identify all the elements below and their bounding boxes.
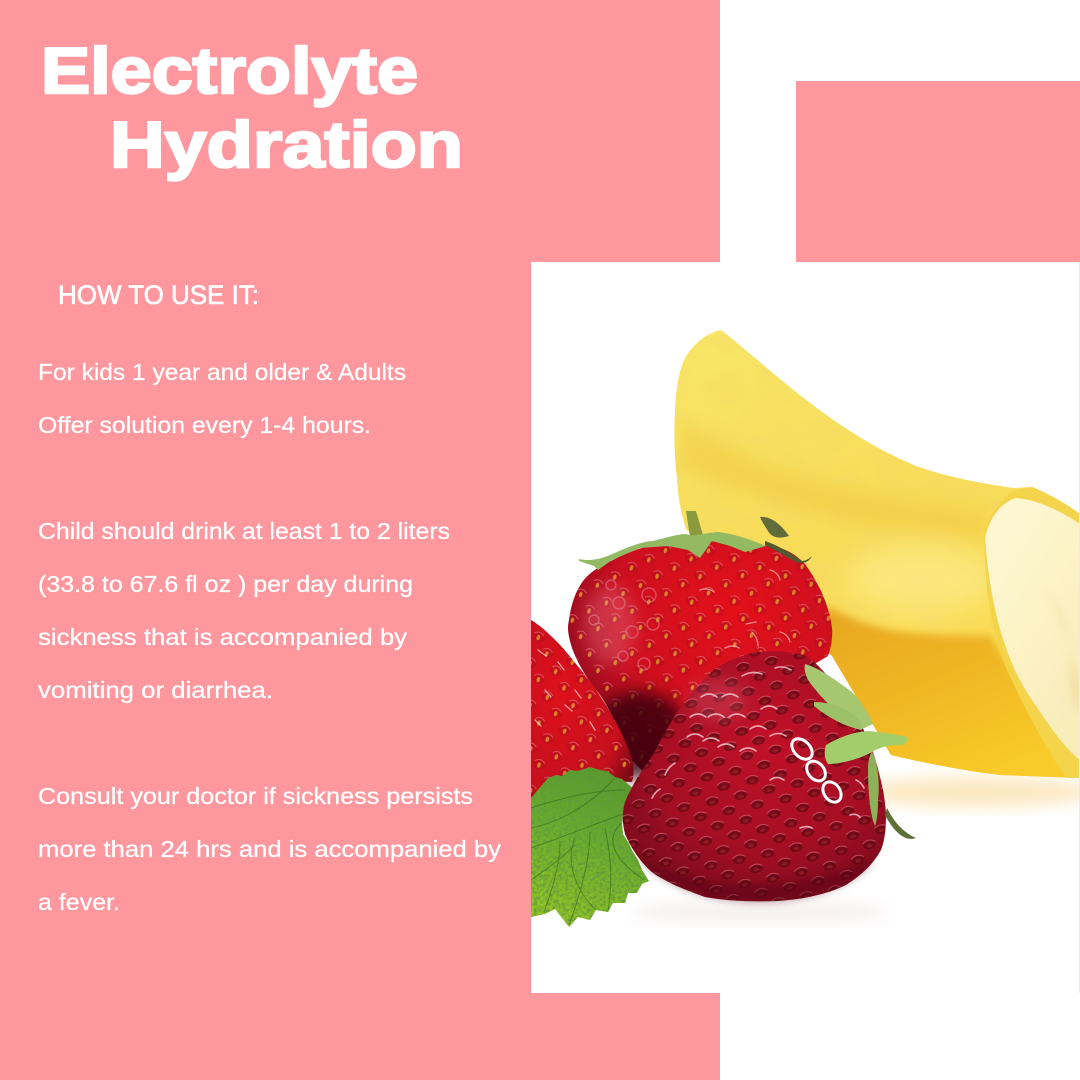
strawberry: front [623, 651, 886, 902]
title [41, 34, 463, 181]
photo background [531, 262, 720, 993]
banana skin [674, 330, 1080, 778]
soft shadows [630, 777, 1080, 922]
sepal lower [825, 731, 907, 764]
text block: when to consult a doctor: a fever. [38, 889, 120, 915]
sepal upper [805, 664, 873, 730]
leaf texture [531, 765, 651, 930]
curled sepal [760, 517, 789, 538]
text block: daily amount: vomiting or diarrhea. [38, 677, 273, 703]
strawberry sheen [584, 585, 636, 665]
leaf veins [531, 778, 645, 925]
text block: dosing frequency [38, 359, 406, 438]
strawberry base shade [636, 856, 874, 902]
strawberry: top calyx [579, 511, 812, 570]
text block: when to consult a doctor [38, 783, 502, 915]
curled tail [885, 808, 916, 839]
title: Hydration [110, 108, 463, 181]
banana golden underside [826, 603, 1066, 778]
text block: dosing frequency: For kids 1 year and older & Adults [38, 359, 406, 385]
text block: daily amount: sickness that is accompanied by [38, 624, 408, 650]
right tail [765, 541, 812, 563]
sepal middle [814, 702, 862, 730]
banana mottling [674, 415, 976, 482]
strawberry small glints [652, 667, 864, 828]
banana [670, 325, 1080, 790]
text block: daily amount: Child should drink at least 1 to 2 liters [38, 518, 450, 544]
text block: dosing frequency: Offer solution every 1-4 hours. [38, 412, 371, 438]
text block: when to consult a doctor: more than 24 hrs and is accompanied by [38, 836, 502, 862]
banana cut rim [984, 487, 1080, 778]
raspberry leaf [531, 765, 651, 930]
strawberry rim highlights [589, 580, 659, 670]
strawberry shadow base [592, 691, 688, 779]
strawberry: top [568, 541, 832, 790]
pink block: top right [796, 81, 1080, 262]
photo right edge line [1079, 262, 1080, 993]
banana core marks [1053, 601, 1079, 709]
photo: banana and strawberries [531, 262, 1080, 993]
strawberry highlight chain [790, 737, 843, 804]
sepals [579, 532, 766, 570]
strawberry white glints [700, 570, 790, 648]
stem [686, 511, 703, 537]
title: Electrolyte [41, 34, 418, 107]
pink background panel: left [0, 0, 720, 1080]
left strawberry glints [535, 650, 595, 730]
banana mottled band [680, 420, 990, 545]
banana pale glow [845, 544, 995, 612]
strawberry: front calyx [805, 664, 916, 839]
text block: when to consult a doctor: Consult your doctor if sickness persists [38, 783, 473, 809]
strawberry: left [531, 620, 634, 798]
text block: daily amount: (33.8 to 67.6 fl oz ) per day during [38, 571, 413, 597]
text block: daily amount [38, 518, 450, 703]
heading: how to use it: HOW TO USE IT: [58, 280, 259, 310]
strawberry pale glow [688, 678, 748, 722]
sepal down [868, 752, 879, 826]
banana cut flesh [985, 498, 1080, 760]
